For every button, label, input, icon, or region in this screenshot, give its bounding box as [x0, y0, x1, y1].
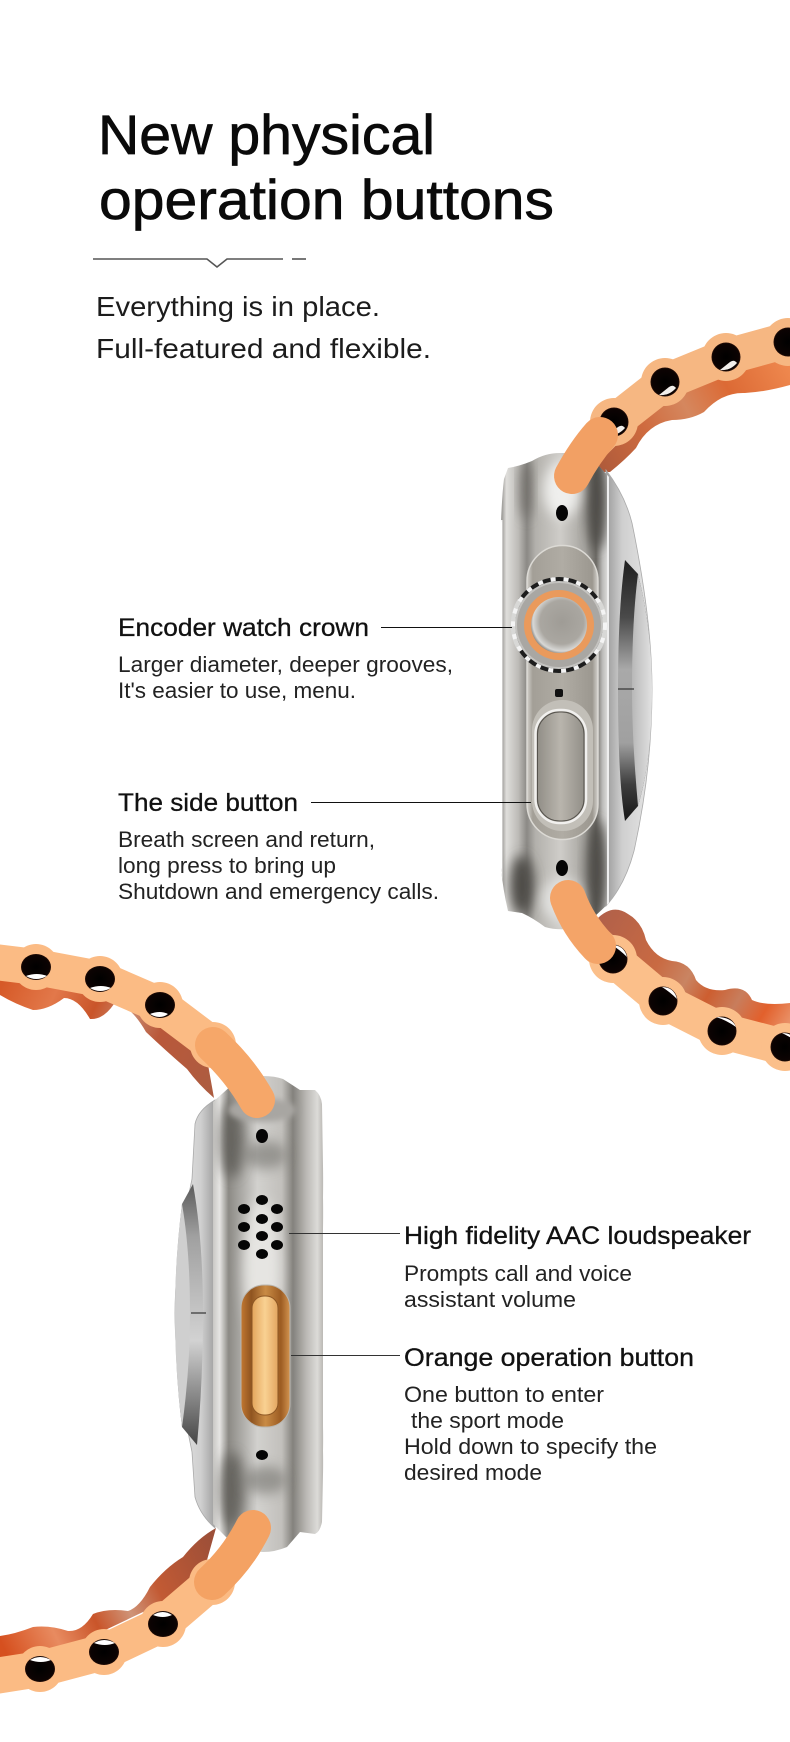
- lug: bottom: [212, 1528, 253, 1582]
- title divider with notch: [93, 259, 306, 267]
- callout: orange operation button: [291, 1344, 694, 1485]
- back plate and sensor: [175, 1100, 215, 1528]
- callout: the side button: long press to bring up: [118, 853, 336, 878]
- microphone dot: [555, 689, 563, 697]
- callout: orange operation button: the sport mode: [411, 1408, 564, 1433]
- watch: speaker side view: [0, 944, 330, 1692]
- speaker holes: [238, 1195, 283, 1259]
- strap: bottom left: [0, 1528, 253, 1692]
- title: [98, 103, 554, 231]
- callout: encoder watch crown: Encoder watch crown: [118, 614, 369, 642]
- callout: orange operation button: Hold down to specify the: [404, 1434, 657, 1459]
- strap: top right: [590, 318, 790, 472]
- subtitle: Everything is in place.: [96, 291, 380, 322]
- band screw holes: [556, 505, 568, 876]
- callout: high fidelity AAC loudspeaker: High fidelity AAC loudspeaker: [404, 1222, 751, 1250]
- callout: orange operation button: desired mode: [404, 1460, 542, 1485]
- lug: bottom: [568, 898, 598, 946]
- subtitle: [96, 291, 431, 364]
- button plate: [527, 546, 598, 839]
- callout: orange operation button: Orange operation button: [404, 1344, 694, 1372]
- subtitle: Full-featured and flexible.: [96, 333, 431, 364]
- back plate and sensor: [606, 470, 652, 906]
- callout: high fidelity AAC loudspeaker: assistant volume: [404, 1287, 576, 1312]
- lug: top: [572, 435, 600, 476]
- callout: the side button: [118, 789, 531, 904]
- callout: orange operation button: One button to enter: [404, 1382, 604, 1407]
- title: operation buttons: [99, 168, 554, 231]
- callout: high fidelity AAC loudspeaker: Prompts call and voice: [404, 1261, 632, 1286]
- case body: [213, 1076, 324, 1552]
- callout: encoder watch crown: Larger diameter, deeper grooves,: [118, 652, 453, 677]
- strap: bottom right: [589, 910, 790, 1071]
- title: New physical: [98, 103, 435, 166]
- encoder crown: [513, 579, 605, 671]
- strap: top left: [0, 944, 257, 1100]
- band screw holes: [256, 1129, 268, 1460]
- side button: [536, 710, 586, 823]
- callout: high fidelity AAC loudspeaker: [289, 1222, 751, 1312]
- callout: the side button: The side button: [118, 789, 298, 817]
- watch: crown side view: [495, 318, 790, 1071]
- callout: the side button: Breath screen and return,: [118, 827, 375, 852]
- lug: top: [213, 1045, 257, 1100]
- orange operation button: [241, 1285, 290, 1427]
- callout: encoder watch crown: It's easier to use, menu.: [118, 678, 356, 703]
- callout: encoder watch crown: [118, 614, 512, 703]
- case body: [501, 453, 609, 930]
- callout: the side button: Shutdown and emergency calls.: [118, 879, 439, 904]
